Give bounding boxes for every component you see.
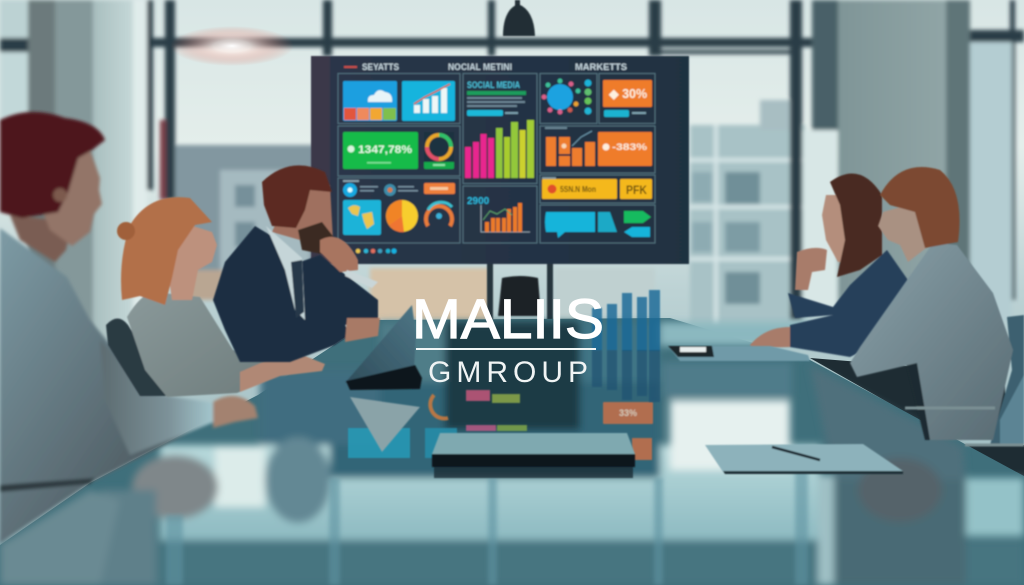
sky reflection panes (160, 445, 820, 540)
notebook and pen (705, 444, 903, 474)
person: bearded man in suit (213, 165, 380, 362)
lower dark band (0, 540, 1024, 585)
display stand and back chair (487, 262, 553, 322)
person: woman with dark hair at right (750, 174, 910, 357)
orange 30 percent tile (603, 80, 652, 117)
weather tile (343, 81, 397, 121)
donut tile (424, 132, 454, 169)
green stat tile (343, 132, 418, 169)
glass conference table (0, 318, 1024, 585)
logo: GMROUP (428, 356, 588, 389)
speech bubble and arrows (545, 211, 651, 238)
growth chart tile (402, 81, 455, 121)
display headings: SEYATTS (362, 62, 399, 72)
logo: MALIIS (412, 287, 604, 350)
orange 30 percent tile: ◆ 30% (608, 87, 647, 101)
yellow stat tiles (542, 177, 652, 199)
line and bar chart (467, 196, 530, 232)
yellow stat tiles: 5SN.N Mon (560, 185, 596, 194)
person: woman in grey shirt at right (850, 167, 1024, 445)
wall display (311, 56, 689, 264)
display headings (344, 62, 627, 72)
tablet and papers at back of table (668, 346, 810, 361)
logo mark bars (592, 290, 660, 402)
reflected window mullions (166, 445, 808, 585)
display headings: NOCIAL METINI (448, 62, 512, 72)
reflected people and pillars (132, 455, 218, 519)
reflection of display on table: 33% (619, 408, 637, 418)
green stat tile: 1347,78% (358, 144, 412, 156)
social media block (467, 80, 526, 116)
network globe icon (542, 78, 592, 114)
display headings: MARKETTS (575, 62, 627, 72)
dark space behind table edge at right (810, 358, 1024, 480)
orange bars and stat: -383% (612, 142, 648, 153)
person: man at far left (0, 112, 258, 543)
yellow stat tiles: PFK (626, 183, 647, 197)
orange bars and stat (545, 127, 652, 166)
icon: pendant lamp (503, 0, 535, 36)
social media block: SOCIAL MEDIA (467, 80, 520, 91)
laptop on table (345, 305, 422, 452)
closed device on table (432, 433, 635, 478)
person: blonde woman (106, 197, 325, 397)
map, pie and gauge row (343, 180, 455, 254)
logo (412, 287, 604, 389)
reflection of display on table (348, 390, 653, 460)
colored bar chart (465, 120, 534, 178)
line and bar chart: 2900 (467, 196, 490, 207)
display reflection block (330, 378, 660, 478)
